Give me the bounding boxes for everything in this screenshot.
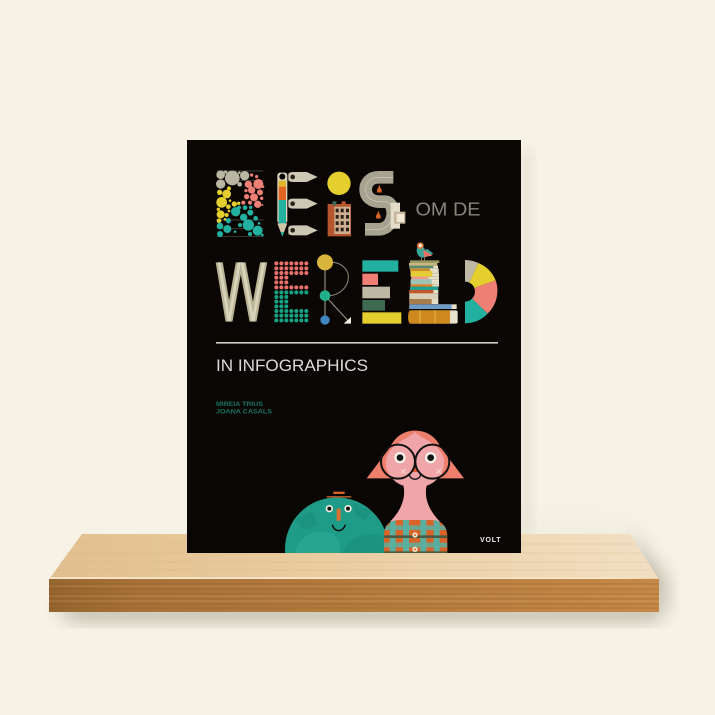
subtitle: IN INFOGRAPHICS: IN INFOGRAPHICS [216, 356, 368, 375]
character: globe [285, 492, 384, 553]
authors [216, 401, 273, 416]
authors: MIREIA TRIUS [216, 401, 264, 408]
shelf front edge [49, 579, 659, 612]
letter W [218, 255, 265, 321]
letter E made of pencil and nibs [277, 172, 318, 237]
letter L as book stack [408, 260, 458, 324]
divider line [216, 342, 498, 344]
book cover [187, 140, 521, 553]
character: girl with glasses [367, 431, 464, 553]
shelf shadow [56, 150, 668, 620]
title word: WERELD, left part [218, 254, 351, 325]
letter D as half donut chart [465, 260, 497, 323]
letter R as a node diagram [317, 254, 351, 325]
letter S as a road with cones and a house [365, 177, 405, 229]
title word: REIS [216, 170, 351, 237]
subtitle: OM DE: OM DE [416, 200, 480, 220]
letter E made of dots [276, 263, 307, 320]
shelf top surface [50, 534, 658, 578]
title word: WERELD, right part [362, 242, 497, 324]
glasses and face [381, 445, 449, 479]
letter I: sun dot and building [327, 172, 351, 236]
bird on the books [417, 242, 433, 260]
authors: JOANA CASALS [216, 408, 273, 416]
letter E as bar chart [362, 260, 401, 324]
letter R made of bubbles [216, 170, 264, 237]
wooden shelf [49, 534, 659, 612]
shirt [384, 520, 448, 553]
publisher logo: VOLT [480, 537, 501, 544]
characters [285, 430, 464, 553]
